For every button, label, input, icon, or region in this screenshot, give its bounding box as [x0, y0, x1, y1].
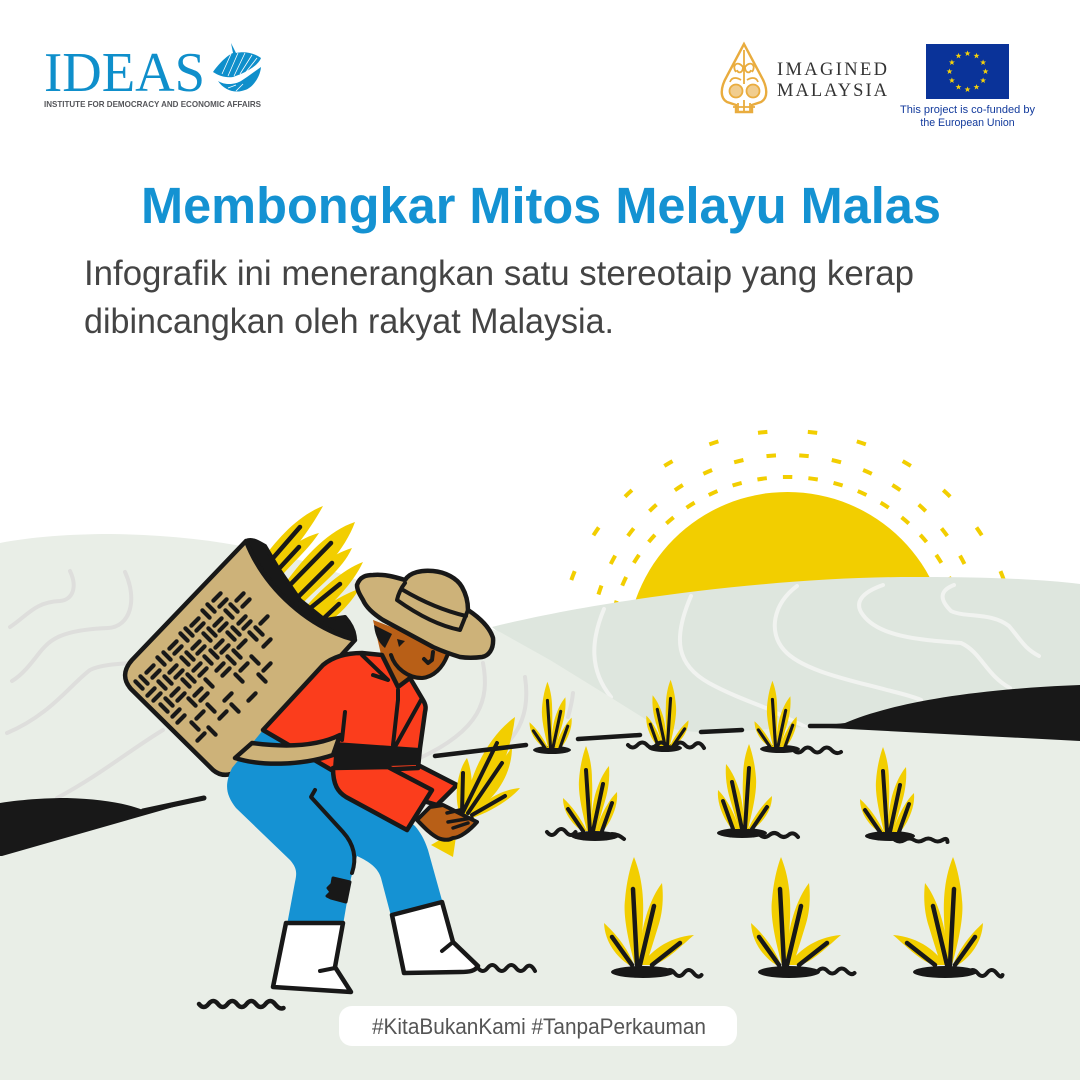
basket opening	[246, 540, 355, 640]
logo: EU flag	[900, 44, 1036, 129]
wordmark line 1: IMAGINED	[777, 60, 887, 80]
logo tagline: INSTITUTE FOR DEMOCRACY AND ECONOMIC AFFAIRS	[44, 99, 261, 109]
logo bird icon	[213, 43, 261, 92]
trousers	[227, 730, 443, 925]
right boot	[392, 902, 478, 973]
co-funding note line 1: This project is co-funded by	[900, 104, 1036, 116]
plant row 3 middle	[751, 857, 854, 978]
left boot	[273, 923, 351, 992]
black furrow left	[143, 798, 204, 811]
left boot fold	[320, 968, 335, 971]
hand	[417, 805, 477, 840]
trouser patch	[327, 878, 350, 902]
far hill	[492, 577, 1080, 750]
face details	[391, 652, 447, 678]
right boot fold	[442, 942, 453, 951]
sun	[627, 492, 949, 814]
plant row 1 left	[530, 682, 572, 754]
black hill left	[0, 798, 205, 856]
rice stalks in basket	[262, 506, 363, 624]
near hill contour lines	[7, 571, 573, 798]
plant row 3 left	[604, 857, 702, 978]
field line over held plant	[435, 745, 526, 756]
eye	[397, 639, 405, 647]
shirt details	[342, 655, 421, 745]
hair	[374, 625, 392, 648]
shirt torso	[263, 653, 426, 772]
ground squiggle	[199, 1001, 284, 1008]
paddy row dashes	[578, 730, 742, 739]
wordmark line 2: MALAYSIA	[777, 81, 888, 101]
knee line	[311, 790, 354, 873]
face	[373, 620, 452, 690]
sun rays	[559, 431, 1017, 653]
title: Membongkar Mitos Melayu Malas	[141, 177, 941, 234]
black furrow right	[810, 724, 850, 728]
intro line 1: Infografik ini menerangkan satu stereotaip yang kerap	[84, 254, 914, 293]
intro line 2: dibincangkan oleh rakyat Malaysia.	[84, 302, 614, 341]
basket	[125, 541, 355, 775]
basket weave	[135, 593, 271, 741]
logo: Imagined Malaysia	[722, 44, 888, 112]
plant row 2 right	[860, 747, 948, 842]
black hill right	[810, 685, 1080, 741]
shirt tail sleeve	[333, 767, 432, 830]
pill background	[339, 1006, 737, 1046]
flag stars	[946, 50, 988, 92]
hat	[357, 571, 493, 658]
gold wayang emblem	[722, 44, 766, 112]
plant row 2 middle	[717, 744, 798, 838]
far sleeve	[385, 765, 457, 805]
hashtags: #KitaBukanKami #TanpaPerkauman	[372, 1014, 706, 1039]
basket strap	[235, 735, 340, 764]
waist belt	[333, 742, 420, 768]
logo: IDEAS	[44, 42, 261, 109]
near hill and ground	[0, 534, 1080, 1080]
plant row 1 middle	[628, 680, 704, 752]
flag field	[926, 44, 1009, 99]
farmer	[125, 506, 520, 992]
logo wordmark: IDEAS	[44, 42, 205, 104]
plant row 2 left	[547, 746, 624, 841]
co-funding note line 2: the European Union	[920, 117, 1015, 129]
plant row 1 right	[754, 681, 841, 753]
plant held in hand	[431, 717, 520, 857]
intro text	[84, 254, 914, 341]
plant by the boot squiggle	[478, 965, 535, 971]
hashtag pill	[339, 1006, 737, 1046]
plant row 3 right	[893, 857, 1002, 978]
far hill contour lines	[594, 585, 1039, 727]
logo bird hatching	[222, 53, 257, 91]
